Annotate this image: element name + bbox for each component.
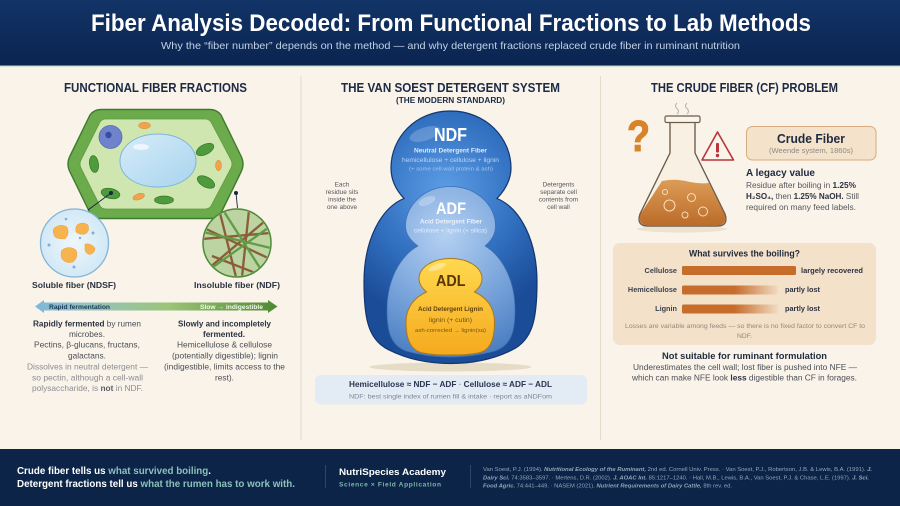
text block: legacy value: H₂SO₄, then 1.25% NaOH. Still bbox=[746, 192, 859, 201]
footer brand: NutriSpecies Academy bbox=[339, 467, 447, 478]
bar: cellulose: Cellulose bbox=[645, 266, 677, 275]
text block: soluble description: so pectin, although a cell-wall bbox=[32, 372, 143, 382]
layer: NDF: Neutral Detergent Fiber bbox=[414, 148, 487, 154]
bar: lignin: partly lost bbox=[785, 304, 821, 313]
side note: right: cell wall bbox=[547, 204, 570, 211]
text block: not suitable: Underestimates the cell wall; lost fiber is pushed into NFE — bbox=[633, 363, 857, 372]
text block: insoluble description: (indigestible, limits access to the bbox=[164, 362, 285, 372]
bar: hemicellulose: Hemicellulose bbox=[628, 285, 677, 294]
side note: right bbox=[539, 182, 578, 211]
footer references: Dairy Sci. 74:3583–3597. · Mertens, D.R. (2002). J. AOAC Int. 85:1217–1240. · Hall, M.B., Lewis, B.A., Van Soest, P.J. & Chase, L.E. (1997). J. Sci. bbox=[483, 476, 869, 482]
side note: left bbox=[326, 182, 359, 211]
text block: not suitable bbox=[631, 351, 857, 382]
arrow: fermentation rate: Slow → indigestible bbox=[200, 304, 263, 311]
subheading: modern standard: (THE MODERN STANDARD) bbox=[396, 96, 505, 105]
icon: warning triangle bbox=[702, 132, 734, 160]
text block: insoluble description: fermented. bbox=[203, 329, 245, 339]
footer takeaway: Detergent fractions tell us what the rumen has to work with. bbox=[17, 479, 295, 490]
layer: NDF: (+ some cell-wall protein & ash) bbox=[409, 166, 493, 172]
layer: NDF bbox=[364, 111, 537, 364]
text block: soluble description: microbes. bbox=[69, 329, 105, 339]
bar: hemicellulose: partly lost bbox=[785, 285, 821, 294]
label: soluble fiber: Soluble fiber (NDSF) bbox=[32, 280, 116, 290]
footer brand: Science × Field Application bbox=[339, 482, 441, 488]
text block: not suitable: which can make NFE look less digestible than CF in forages. bbox=[631, 374, 857, 382]
formula box: NDF: best single index of rumen fill & intake · report as aNDFom bbox=[349, 394, 552, 400]
layer: ADL: Acid Detergent Lignin bbox=[418, 307, 483, 313]
text block: soluble description bbox=[27, 318, 148, 393]
text block: insoluble description: (potentially digestible); lignin bbox=[172, 350, 278, 360]
side note: left: Each bbox=[335, 182, 350, 188]
heading: functional fiber fractions: FUNCTIONAL FIBER FRACTIONS bbox=[64, 81, 247, 95]
footer takeaway bbox=[17, 466, 295, 490]
shadow under nested diagram bbox=[370, 362, 532, 372]
formula box: Hemicellulose ≈ NDF − ADF · Cellulose ≈ ADF − ADL bbox=[349, 379, 552, 389]
bar: lignin: Lignin bbox=[655, 304, 677, 313]
layer: NDF: hemicellulose + cellulose + lignin bbox=[402, 157, 499, 164]
layer: ADL: lignin (+ cutin) bbox=[429, 317, 472, 324]
plant cell diagram bbox=[68, 110, 243, 218]
text block: soluble description: Dissolves in neutral detergent — bbox=[27, 362, 148, 372]
footer references: Van Soest, P.J. (1994). Nutritional Ecology of the Ruminant, 2nd ed. Cornell Univ. Press. · Van Soest, P.J., Robertson, J.B. & Lewis, B.A. (1991). J. bbox=[483, 467, 872, 473]
card note: NDF. bbox=[737, 333, 752, 340]
side note: left: residue sits bbox=[326, 189, 359, 196]
subtitle: Why the “fiber number” depends on the method — and why detergent fractions replaced crude fiber in ruminant nutrition bbox=[161, 40, 740, 52]
icon: soluble fiber circle bbox=[40, 209, 108, 277]
arrow: fermentation rate bbox=[35, 300, 278, 313]
callout line: insoluble bbox=[234, 191, 238, 208]
text block: legacy value bbox=[746, 168, 859, 212]
bar: cellulose bbox=[645, 266, 863, 275]
layer: NDF: NDF bbox=[434, 125, 467, 145]
callout: crude fiber: (Weende system, 1860s) bbox=[769, 148, 853, 155]
footer brand bbox=[339, 467, 447, 488]
bar: cellulose: largely recovered bbox=[801, 266, 863, 275]
panel: functional fiber fractions bbox=[27, 81, 285, 393]
card: what survives the boiling: What survives the boiling? bbox=[689, 248, 800, 258]
text block: not suitable: Not suitable for ruminant formulation bbox=[662, 351, 827, 362]
card note bbox=[625, 323, 865, 340]
side note: right: Detergents bbox=[543, 182, 575, 188]
text block: legacy value: A legacy value bbox=[746, 168, 815, 179]
heading: crude fiber problem: THE CRUDE FIBER (CF) PROBLEM bbox=[651, 81, 838, 95]
label: insoluble fiber: Insoluble fiber (NDF) bbox=[194, 280, 280, 290]
footer references: Food Agric. 74:441–449. · NASEM (2021). Nutrient Requirements of Dairy Cattle, 8th rev. ed. bbox=[483, 484, 732, 490]
callout: crude fiber bbox=[746, 126, 876, 160]
icon: insoluble fiber circle bbox=[202, 209, 271, 277]
footer takeaway: Crude fiber tells us what survived boiling. bbox=[17, 466, 211, 477]
side note: right: separate cell bbox=[540, 189, 577, 196]
text block: soluble description: Rapidly fermented by rumen bbox=[33, 318, 141, 328]
bar: lignin bbox=[655, 304, 821, 314]
panel: van soest detergent system bbox=[315, 81, 587, 404]
side note: left: inside the bbox=[328, 196, 356, 204]
side note: right: contents from bbox=[539, 196, 578, 204]
card: what survives the boiling bbox=[613, 243, 876, 345]
callout line: soluble bbox=[88, 191, 113, 210]
text block: insoluble description bbox=[164, 318, 285, 382]
text block: soluble description: Pectins, β-glucans, fructans, bbox=[34, 340, 140, 350]
layer: ADL bbox=[406, 258, 494, 355]
icon: question mark: ? bbox=[627, 112, 650, 161]
side note: left: one above bbox=[327, 204, 358, 211]
heading: van soest: THE VAN SOEST DETERGENT SYSTEM bbox=[341, 81, 560, 95]
layer: ADF: ADF bbox=[436, 200, 466, 218]
text block: insoluble description: Hemicellulose & cellulose bbox=[177, 340, 272, 350]
layer: ADF: Acid Detergent Fiber bbox=[420, 218, 482, 226]
layer: ADF: cellulose + lignin (+ silica) bbox=[414, 228, 487, 234]
footer band bbox=[0, 449, 900, 506]
layer: ADF bbox=[387, 186, 515, 357]
callout: crude fiber: Crude Fiber bbox=[777, 132, 845, 146]
text block: soluble description: polysaccharide, is not in NDF. bbox=[32, 383, 143, 393]
text block: legacy value: required on many feed labels. bbox=[746, 203, 856, 212]
footer references bbox=[483, 467, 872, 490]
title: Fiber Analysis Decoded: From Functional Fractions to Lab Methods bbox=[91, 10, 811, 37]
text block: insoluble description: Slowly and incompletely bbox=[178, 318, 271, 328]
text block: insoluble description: rest). bbox=[215, 372, 234, 382]
nested diagram: NDF ADF ADL bbox=[364, 111, 537, 364]
text block: legacy value: Residue after boiling in 1.25% bbox=[746, 181, 856, 190]
layer: ADL: ash-corrected → lignin(sa) bbox=[415, 328, 486, 334]
header band bbox=[0, 0, 900, 66]
arrow: fermentation rate: Rapid fermentation bbox=[49, 304, 110, 311]
card note: Losses are variable among feeds — so there is no fixed factor to convert CF to bbox=[625, 323, 865, 330]
layer: ADL: ADL bbox=[436, 273, 466, 290]
icon: flask bbox=[637, 103, 727, 232]
bar: hemicellulose bbox=[628, 285, 821, 294]
formula box bbox=[315, 375, 587, 404]
panel: crude fiber problem bbox=[613, 81, 876, 382]
text block: soluble description: galactans. bbox=[68, 350, 106, 360]
